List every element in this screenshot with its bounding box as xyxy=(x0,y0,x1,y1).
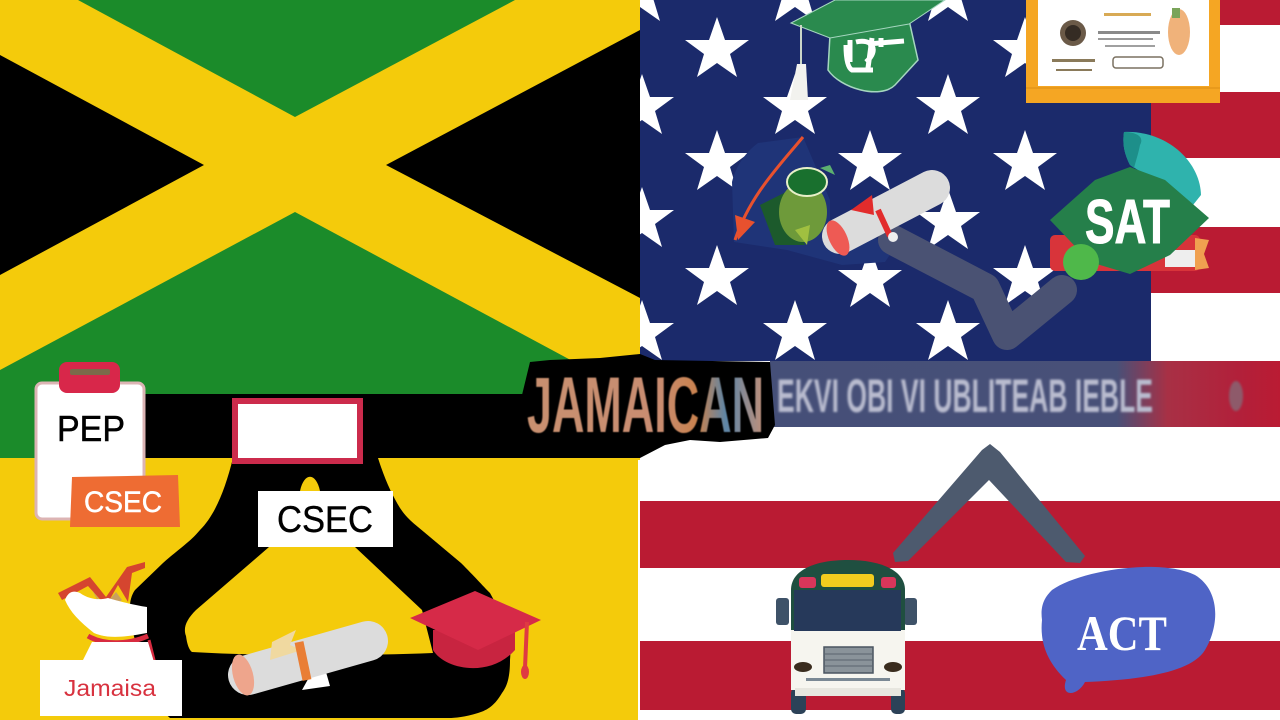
label: PEP: PEP xyxy=(57,408,125,449)
icon: certificate xyxy=(1026,0,1220,103)
panel: American flag xyxy=(608,0,1280,720)
icon: SAT badge with book: SAT xyxy=(1085,188,1170,257)
black pathway road xyxy=(130,394,640,718)
badge: orange CSEC xyxy=(70,475,180,527)
panel: Jamaican flag xyxy=(0,0,640,460)
badge: orange CSEC: CSEC xyxy=(84,486,162,519)
speech bubble: ACT xyxy=(1042,567,1215,693)
icon: clipboard with PEP xyxy=(36,362,144,519)
icon: rolled diploma, American side xyxy=(822,188,1062,335)
empty red framed box xyxy=(235,401,360,461)
icon: rolled diploma, Jamaica side xyxy=(228,630,368,698)
icon: Jamaican figure with label xyxy=(40,562,182,716)
icon: owl mascot on blue panel xyxy=(732,137,900,265)
panel: yellow lower left ground xyxy=(0,458,638,720)
icon: SAT badge with book xyxy=(1050,132,1209,280)
title: JAMAICAN: JAMAICAN xyxy=(527,360,764,449)
box: CSEC label: CSEC xyxy=(277,499,373,540)
icon: green graduation cap xyxy=(790,0,945,100)
title: JAMAICAN xyxy=(520,354,775,458)
icon: school bus xyxy=(776,560,917,714)
label: Jamaisa: Jamaisa xyxy=(64,675,156,701)
icon: red graduation cap xyxy=(410,591,541,679)
box: CSEC label xyxy=(258,477,393,547)
arrow: gray chevron xyxy=(893,444,1085,563)
speech bubble: ACT: ACT xyxy=(1077,605,1167,661)
